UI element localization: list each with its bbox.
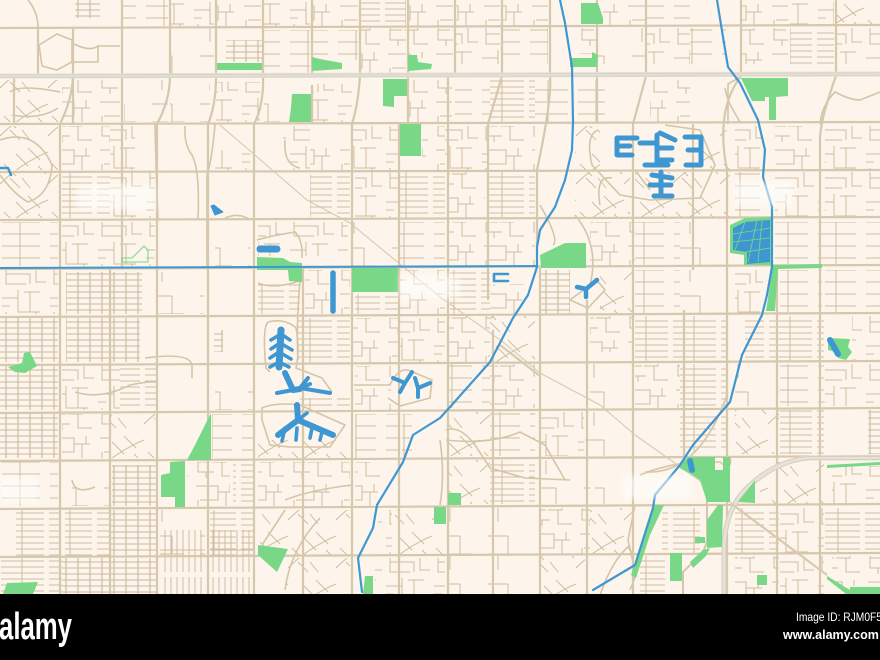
- lakes: southwest lobe: [279, 330, 281, 367]
- park: top row strip: [217, 63, 262, 70]
- lakes: southwest lower basin: [278, 405, 333, 435]
- small lakes: [0, 168, 11, 175]
- canal: horizontal waterway: [0, 266, 537, 268]
- footer bar: [0, 594, 880, 660]
- lakes: star-shaped ponds: [393, 372, 430, 397]
- lakes: southwest lower fingers: [282, 413, 322, 441]
- freeways: [0, 73, 880, 594]
- footer logo: alamy: [0, 606, 72, 648]
- lakes: southwest central arms: [285, 373, 300, 390]
- wetland block with blue lots: [733, 220, 770, 264]
- lakes: southwest lobe fingers: [270, 334, 292, 367]
- diagonal rail and road lines: [220, 125, 827, 594]
- faint watermark haze: [0, 182, 793, 503]
- canal: eastern waterway: [593, 0, 772, 590]
- lakes: southwest side arms: [277, 378, 330, 393]
- lakes: northeast fingers: [617, 133, 701, 196]
- canal: main diagonal waterway: [358, 0, 573, 592]
- website address: www.alamy.com: [782, 628, 879, 642]
